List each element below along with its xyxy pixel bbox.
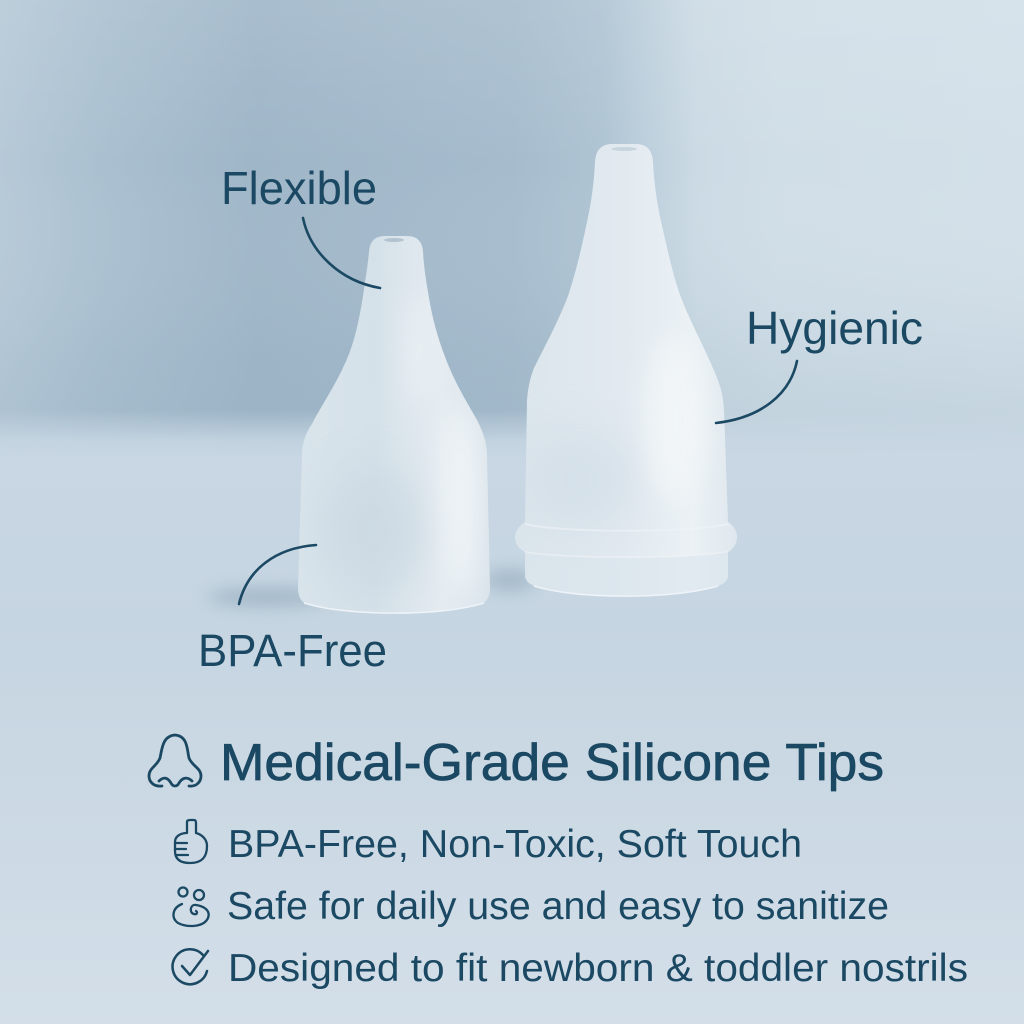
label: BPA-Free: BPA-Free xyxy=(198,625,387,676)
large tip flange ridge xyxy=(525,524,728,557)
icon: check circle xyxy=(173,949,208,984)
large silicone tip xyxy=(515,144,737,597)
feature row: Designed to fit xyxy=(173,947,968,990)
callout: BPA-Free xyxy=(198,545,387,676)
label: Hygienic: Hygienic xyxy=(746,302,923,354)
icon: thumb tip xyxy=(175,820,207,863)
small tip body xyxy=(298,236,490,614)
text: BPA-Free, Non-Toxic, Soft Touch: BPA-Free, Non-Toxic, Soft Touch xyxy=(228,823,802,866)
text: Safe for daily use and easy to sanitize: Safe for daily use and easy to sanitize xyxy=(227,885,889,928)
icon: water and hands xyxy=(173,888,209,926)
title: Medical-Grade Silicone Tips xyxy=(220,734,884,792)
feature row: BPA-Free xyxy=(175,820,802,866)
small tip soft shading xyxy=(336,418,486,582)
small silicone tip xyxy=(298,236,490,614)
large tip base band xyxy=(525,552,728,597)
text: Designed to fit newborn & toddler nostrils: Designed to fit newborn & toddler nostrils xyxy=(228,947,968,990)
feature row: Safe for daily use xyxy=(173,885,889,928)
callout: Flexible xyxy=(221,162,380,288)
small tip bottom rim xyxy=(304,603,484,613)
heading block xyxy=(149,734,884,792)
callout: Hygienic xyxy=(716,302,923,423)
small tip opening xyxy=(384,238,404,242)
large tip opening xyxy=(611,147,637,151)
large tip lower shading xyxy=(556,366,678,510)
shadow: left tip xyxy=(208,588,328,606)
background floor xyxy=(0,410,1024,1024)
background wall xyxy=(0,0,1024,470)
large tip bottom rim xyxy=(534,586,718,596)
leader line: Flexible xyxy=(303,218,380,288)
label: Flexible: Flexible xyxy=(221,162,377,214)
shadow: right tip xyxy=(484,569,536,591)
leader line: Hygienic xyxy=(716,361,797,423)
feature list xyxy=(173,820,968,990)
icon: nose xyxy=(149,735,201,786)
large tip body xyxy=(515,144,737,597)
leader line: BPA-Free xyxy=(239,545,316,604)
